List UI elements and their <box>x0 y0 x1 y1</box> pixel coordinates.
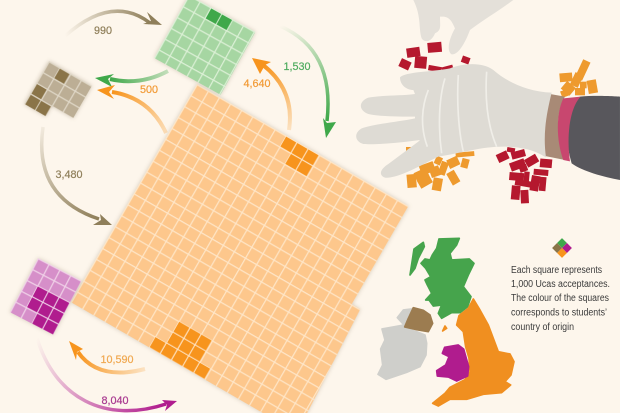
arrow: 3,480 Northern Ireland to England <box>42 127 112 225</box>
arrow: orange 500 England to Northern Ireland: 500 <box>140 84 158 96</box>
arrow: 3,480 Northern Ireland to England: 3,480 <box>55 169 83 181</box>
pink cuff <box>558 97 581 161</box>
arrow: 8,040 Wales to England <box>37 338 177 411</box>
panel: large orange grid, England <box>71 84 423 413</box>
arrow: 990 Northern Ireland to Scotland <box>65 11 162 37</box>
arrow: 1,530 Scotland to England: 1,530 <box>283 61 311 73</box>
legend icon: four-colour diamond <box>552 238 572 258</box>
panel: brown grid, Northern Ireland <box>24 61 92 129</box>
legend text <box>511 265 610 333</box>
Ireland <box>378 309 427 379</box>
arrow: 4,640 England to Scotland: 4,640 <box>243 78 271 90</box>
map: UK and Ireland coloured by country <box>378 238 514 406</box>
glove folds <box>423 72 497 153</box>
arrow: 990 Northern Ireland to Scotland: 990 <box>94 25 112 37</box>
legend text: corresponds to students’ <box>511 308 607 318</box>
Northern Ireland <box>405 308 433 332</box>
England <box>433 299 514 406</box>
sleeve <box>566 96 620 180</box>
arrow: 4,640 England to Scotland <box>243 58 290 130</box>
arrow: 10,590 England to Wales <box>69 341 145 373</box>
arrow: 8,040 Wales to England: 8,040 <box>101 395 129 407</box>
Wales <box>437 345 469 381</box>
arrow: orange 500 England to Northern Ireland <box>97 84 166 133</box>
skin at the wrist <box>540 94 565 160</box>
legend text: 1,000 Ucas acceptances. <box>511 279 610 290</box>
photo: gloved hands arranging coloured tiles <box>356 0 620 204</box>
glove: upper hand <box>413 0 513 54</box>
glove: lower hand <box>356 64 552 178</box>
arrow: 1,530 Scotland to England <box>280 26 336 138</box>
arrow: green 500 Scotland to Northern Ireland <box>95 71 168 87</box>
panel: purple grid, Wales <box>10 258 81 335</box>
Scotland <box>410 238 474 318</box>
panel: green grid, Scotland <box>154 0 255 95</box>
legend text: country of origin <box>511 322 574 333</box>
legend text: Each square represents <box>511 265 602 276</box>
arrow: 10,590 England to Wales: 10,590 <box>100 354 134 366</box>
